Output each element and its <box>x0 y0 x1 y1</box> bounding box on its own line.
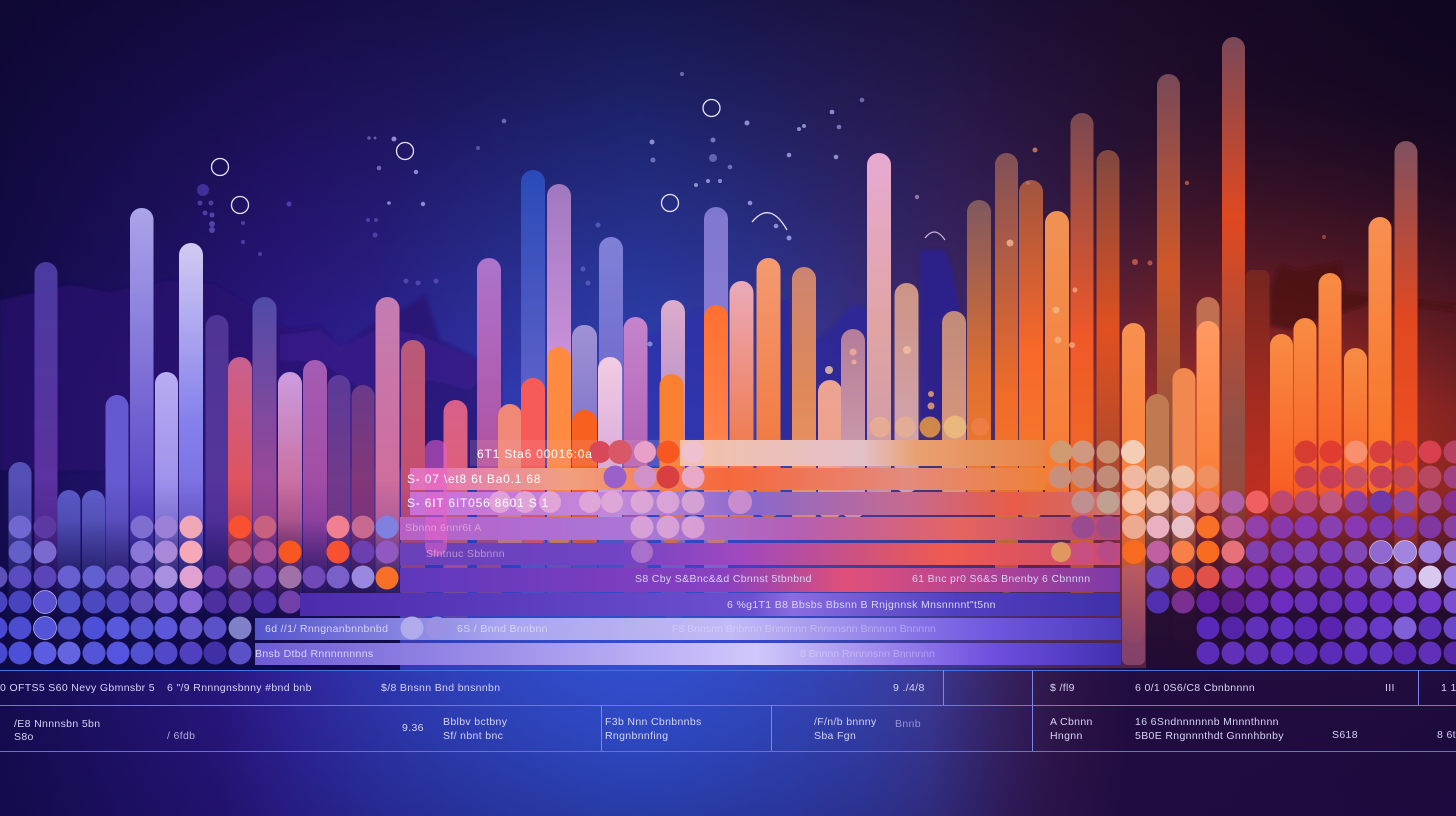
text rows on the bands <box>255 447 1090 660</box>
bars: back row, tall bars <box>34 37 1418 667</box>
band label 9 left: Bnsb Dtbd Rnnnnnnnns <box>255 648 374 660</box>
bars: front row, orange group <box>967 150 1392 654</box>
band label 9 faint: 8 Bnnnn Rnnnnsnn Bnnnnnn <box>800 648 935 660</box>
band label 1: 6T1 Sta6 00016:0a <box>477 447 593 461</box>
table row 2: /E8 Nnnnsbn 5bn <box>14 718 100 730</box>
horizontal bands <box>255 440 1121 665</box>
band label 7: 6 %g1T1 B8 Bbsbs Bbsnn B Rnjgnnsk Mnsnnnnt"t5nn <box>727 599 996 611</box>
table row 2: Sf/ nbnt bnc <box>443 730 503 742</box>
band label 6 left: S8 Cby S&Bnc&&d Cbnnst 5tbnbnd <box>635 573 812 585</box>
dot grid: right matrix <box>1146 440 1456 664</box>
band label 4: Sbnnn 6nnr6t A <box>405 522 482 534</box>
table row 1: 9 ./4/8 <box>893 682 925 694</box>
band label 6 right: 61 Bnc pr0 S6&S Bnenby 6 Cbnnnn <box>912 573 1090 585</box>
table row 1: III <box>1385 682 1395 694</box>
table row 2: 16 6Sndnnnnnnb Mnnnthnnn <box>1135 716 1279 728</box>
translucent column across lower bands <box>1122 565 1145 665</box>
table row 2: S8o <box>14 731 34 743</box>
table row 2: F3b Nnn Cbnbnnbs <box>605 716 702 728</box>
band label 8 right: 6S / Bnnd Bnnbnn <box>457 623 548 635</box>
scatter particles <box>197 72 1326 410</box>
band label 8 faint: F8 Bnnsnn Bnbnnn Bnnnnnn Rnnnnsnn Bnnnnn Bnnnnn <box>672 623 936 635</box>
band label 8 left: 6d //1/ Rnngnanbnnbnbd <box>265 623 388 635</box>
table row 2: Rngnbnnfing <box>605 730 668 742</box>
overlay column: pink translucent strip <box>425 440 447 556</box>
table row 1: 0 OFTS5 S60 Nevy Gbmnsbr 5 <box>0 682 155 694</box>
dot overlays on the bands <box>400 416 1146 640</box>
icons: outlined rings <box>212 100 945 240</box>
table row 2: Sba Fgn <box>814 730 856 742</box>
dot grid: left matrix <box>0 516 398 664</box>
table rules <box>0 670 1456 752</box>
table row 1: 6 "/9 Rnnngnsbnny #bnd bnb <box>167 682 312 694</box>
band label 5: Sfntnuc Sbbnnn <box>426 548 505 560</box>
table row 2: 9.36 <box>402 722 424 734</box>
table row 1 <box>0 682 1456 694</box>
table row 2: 5B0E Rngnnnthdt Gnnnhbnby <box>1135 730 1284 742</box>
band label 2: S- 07 \et8 6t Ba0.1 68 <box>407 472 541 486</box>
table row 2: Hngnn <box>1050 730 1083 742</box>
table row 2: / 6fdb <box>167 730 195 742</box>
data table <box>0 670 1456 752</box>
table row 2: S618 <box>1332 729 1358 741</box>
table row 1: $/8 Bnsnn Bnd bnsnnbn <box>381 682 500 694</box>
table row 2: /F/n/b bnnny <box>814 716 877 728</box>
dark backing behind dot grids <box>0 490 1456 670</box>
band label 3: S- 6IT 6IT056 8601 S 1 <box>407 496 549 510</box>
table row 2 <box>14 716 1456 743</box>
table row 2: A Cbnnn <box>1050 716 1093 728</box>
bars: front row, left and centre <box>8 153 966 662</box>
table row 2: Bblbv bctbny <box>443 716 508 728</box>
table row 2: Bnnb <box>895 718 921 730</box>
skyline silhouettes <box>0 250 1456 470</box>
table row 1: $ /fl9 <box>1050 682 1075 694</box>
table row 1: 6 0/1 0S6/C8 Cbnbnnnn <box>1135 682 1255 694</box>
bar chart: vertical rounded bars <box>8 37 1418 667</box>
